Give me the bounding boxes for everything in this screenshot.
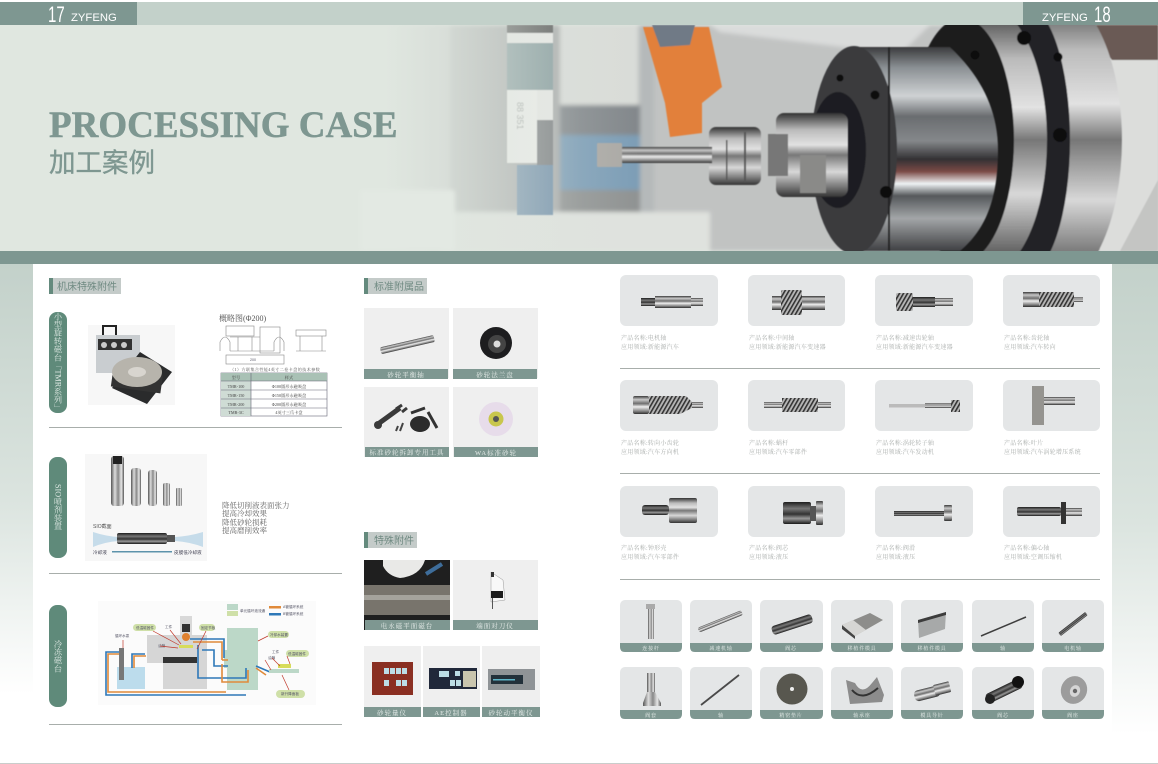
schematic drawing: 200 (250, 358, 256, 362)
orange coolant nozzle (643, 25, 722, 137)
product: gear shaft (1003, 275, 1100, 351)
cooling system diagram (98, 601, 316, 705)
pill label: small rotary table: 小型旋转磁台「TMR系列」 (53, 311, 62, 412)
product: valve core (748, 486, 845, 561)
SIO benefit text: 提高磨削效率 (222, 525, 267, 535)
SIO benefit text: 提高冷却效果 (222, 508, 267, 518)
right brand: ZYFENG (1042, 12, 1088, 24)
cooling system diagram: 新升降面板 (281, 691, 299, 696)
spec table (221, 373, 327, 416)
product: eccentric shaft: 应用领域:空调压缩机 (1004, 553, 1062, 561)
part: valve core dark: 阀芯 (997, 712, 1009, 719)
hero banner with spindle photo illustration (0, 25, 1158, 251)
part: reducer shaft (690, 600, 752, 652)
machine plate with engraving (507, 25, 553, 215)
spec table: TMR-200 (228, 402, 244, 407)
schematic drawing: 概略图(Φ200) (219, 313, 267, 323)
card: dynamic balancer: 砂轮动平衡仪 (488, 708, 534, 717)
part: long shaft (690, 667, 752, 719)
product: valve slide: 应用领域:液压 (876, 553, 915, 561)
SIO benefit text: 降低切削液表面张力 (222, 500, 290, 510)
card: balance shaft (364, 308, 449, 379)
left page number: 17 (48, 2, 65, 27)
spec table: 样式 (285, 374, 293, 381)
product: turbine rotor shaft: 应用领域:汽车发动机 (876, 448, 934, 456)
product: valve slide (875, 486, 973, 561)
pill label: SIO device: SIO喷剂装置 (53, 484, 62, 530)
cooling system diagram: 固定节板 (201, 625, 216, 630)
part: shaft: 轴 (1000, 645, 1006, 652)
product: turbine rotor shaft (875, 380, 973, 456)
grinding wheel shaft (597, 143, 712, 167)
product photo: SIO nozzles (85, 454, 207, 561)
card: WA grinding wheel (453, 387, 538, 457)
card: magnetic table: 电永磁平面磁台 (381, 621, 433, 630)
part: shaft (972, 600, 1034, 652)
product: intermediate shaft: 产品名称:中间轴 (749, 334, 795, 342)
panel: product cases row 2 (620, 380, 1100, 456)
cooling system diagram: 工件 (272, 649, 280, 654)
machine plate with engraving: 88 351 (515, 102, 525, 130)
spec table: Φ100圆形永磁吸盘 (272, 383, 307, 390)
product: steering pinion: 产品名称:转向小齿轮 (621, 439, 679, 447)
product: reduction gear shaft: 产品名称:减速齿轮轴 (876, 334, 934, 342)
card: AE controller (423, 646, 480, 717)
part: bearing seat (831, 667, 893, 719)
product: gear shaft: 产品名称:齿轮轴 (1004, 334, 1050, 342)
panel: machine special accessories (49, 278, 342, 725)
hero title english: PROCESSING CASE (49, 105, 398, 146)
panel: small parts grid (620, 600, 1104, 719)
card: magnetic table (364, 560, 450, 630)
card: flange (453, 308, 538, 379)
product photo: SIO nozzles: SIO截面 (93, 523, 112, 530)
part: long shaft: 轴 (718, 712, 724, 719)
schematic drawing (219, 313, 326, 364)
product: motor shaft: 应用领域:新能源汽车 (621, 343, 679, 351)
SIO benefit text: 降低砂轮损耗 (222, 517, 267, 527)
right page number: 18 (1094, 2, 1111, 27)
product: valve core: 产品名称:阀芯 (749, 544, 789, 552)
product: valve slide: 产品名称:阀滑 (876, 544, 915, 552)
heading: machine accessories (49, 278, 121, 294)
product photo: rotary table with controller (88, 325, 175, 405)
cooling system diagram: 工件 (165, 624, 173, 629)
product: reduction gear shaft: 应用领域:新能源汽车变速器 (876, 343, 953, 351)
part: mold guide pin (901, 667, 963, 719)
product: reduction gear shaft (875, 275, 973, 351)
card: wheel gauge (364, 646, 421, 717)
part: implant mold plate: 移植件模具 (917, 645, 947, 652)
heading: standard accessories: 标准附属品 (374, 280, 424, 293)
part: valve sleeve (620, 667, 682, 719)
part: implant mold (831, 600, 893, 652)
product photo: SIO nozzles: 冷却液 (93, 549, 107, 556)
product: steering pinion: 应用领域:汽车方向机 (621, 448, 679, 456)
pill label: cryo table (49, 605, 67, 707)
rear spindle rings (928, 25, 1158, 251)
product: blade (1003, 380, 1100, 456)
spec table: TMR-100 (228, 384, 244, 389)
card: wheel gauge: 砂轮量仪 (377, 708, 407, 717)
main spindle body (810, 46, 998, 254)
part: bearing seat: 轴承座 (853, 712, 871, 719)
part: valve sleeve: 阀套 (645, 712, 657, 719)
cooling system diagram: 油膜 (268, 655, 276, 660)
part: valve seat (1042, 667, 1104, 719)
product: blade: 产品名称:叶片 (1004, 439, 1043, 447)
card: flange: 砂轮法兰盘 (476, 370, 514, 379)
left brand: ZYFENG (71, 12, 117, 24)
panel: product cases row 1 (620, 275, 1100, 351)
spec table: TMR-150 (228, 393, 244, 398)
product: intermediate shaft: 应用领域:新能源汽车变速器 (749, 343, 826, 351)
part: motor shaft (1042, 600, 1104, 652)
card: AE controller: AE控制器 (434, 708, 468, 717)
spec table: Φ200圆形永磁吸盘 (272, 401, 307, 408)
product: steering pinion (620, 380, 718, 456)
card: disassembly tools: 标准砂轮拆卸专用工具 (370, 448, 444, 456)
spec table: Φ150圆形永磁吸盘 (272, 392, 307, 399)
part: precision shim (760, 667, 823, 719)
product: blade: 应用领域:汽车涡轮增压系统 (1004, 448, 1081, 456)
part: motor shaft: 电机轴 (1064, 645, 1082, 652)
part: reducer shaft: 减速机轴 (709, 645, 733, 652)
product: turbine rotor shaft: 产品名称:涡轮转子轴 (876, 439, 934, 447)
part: valve core (760, 600, 823, 652)
card: dynamic balancer (482, 646, 540, 717)
part: implant mold: 移植件模具 (847, 645, 877, 652)
SIO benefit text (222, 500, 290, 535)
collet (709, 127, 761, 185)
part: implant mold plate (901, 600, 963, 652)
heading: special accessories: 特殊附件 (374, 534, 414, 547)
fade overlay (378, 25, 608, 251)
hero title chinese: 加工案例 (49, 148, 155, 178)
product: intermediate shaft (748, 275, 845, 351)
product: gear shaft: 应用领域:汽车转向 (1004, 343, 1056, 351)
product: worm: 应用领域:汽车零部件 (749, 448, 807, 456)
panel: product cases row 3 (620, 486, 1100, 561)
photo backdrop (442, 25, 1100, 251)
part: valve core: 阀芯 (785, 645, 797, 652)
heading: machine accessories: 机床特殊附件 (57, 280, 117, 293)
card: balance shaft: 砂轮平衡轴 (387, 370, 425, 379)
collet nut (768, 113, 848, 197)
part: valve seat: 阀座 (1067, 712, 1079, 719)
product: worm: 产品名称:蜗杆 (749, 439, 788, 447)
spec table: 4英寸三爪卡盘 (275, 409, 303, 416)
part: connecting rod: 连接杆 (642, 645, 660, 652)
product: motor shaft: 产品名称:电机轴 (621, 334, 667, 342)
header lower band (0, 251, 1158, 264)
cooling system diagram: 低温磁固件 (136, 625, 154, 630)
card: disassembly tools (364, 387, 449, 457)
product: eccentric shaft: 产品名称:偏心轴 (1004, 544, 1050, 552)
panel: special accessories (364, 532, 540, 717)
part: valve core dark (972, 667, 1034, 719)
pill label: SIO device (49, 457, 67, 558)
cooling system diagram: 低温磁固件 (288, 651, 306, 656)
product: eccentric shaft (1003, 486, 1100, 561)
cooling system diagram: B管循环系统 (283, 611, 304, 616)
product: bell housing: 应用领域:汽车零部件 (621, 553, 679, 561)
spec table: 型号 (232, 374, 240, 381)
product: valve core: 应用领域:液压 (749, 553, 788, 561)
part: connecting rod (620, 600, 682, 652)
top header bar (0, 2, 1158, 27)
cooling system diagram: 冷却水装置 (270, 632, 288, 637)
spec caption: （1）方联集合性能4英寸二卷卡盘的技术参数 (230, 366, 321, 373)
card: tool setter: 端面对刀仪 (476, 621, 514, 630)
cooling system diagram: 循环水泵 (115, 633, 130, 638)
product: bell housing (620, 486, 718, 561)
card: tool setter (453, 560, 538, 630)
pill label: small rotary table (49, 311, 67, 413)
product photo: SIO nozzles: 皮膜低冷却液 (174, 549, 202, 556)
product: motor shaft (620, 275, 718, 351)
cooling system diagram: A管循环系统 (283, 604, 304, 609)
heading: standard accessories (364, 278, 427, 294)
heading: special accessories (364, 532, 417, 548)
cooling system diagram: 单元循环液流通 (240, 608, 266, 613)
card: WA grinding wheel: WA标准砂轮 (475, 448, 517, 457)
panel: standard accessories (364, 278, 538, 457)
product: bell housing: 产品名称:钟形壳 (621, 544, 667, 552)
cooling system diagram: 油膜 (158, 643, 166, 648)
part: mold guide pin: 模具导针 (920, 712, 944, 719)
fade block (427, 190, 456, 248)
part: precision shim: 精密垫片 (779, 712, 803, 719)
spec table: TMR-3C (228, 410, 244, 415)
product: worm (748, 380, 845, 456)
pill label: cryo table: 冷冻磁台 (53, 639, 62, 673)
page background side strips (0, 264, 1158, 764)
